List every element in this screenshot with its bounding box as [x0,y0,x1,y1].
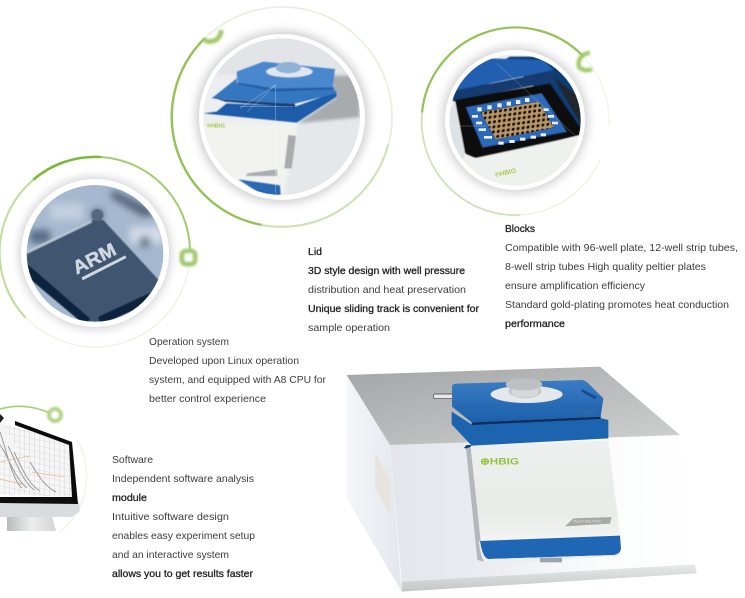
panel: software feature [0,406,87,532]
text block: software [112,455,255,580]
text block: lid: 3D style design with well pressure [308,266,465,277]
logo: blocks photo: ®HBIO [494,167,517,179]
text block: software: module [112,493,147,504]
text block: software: enables easy experiment setup [112,531,255,542]
text block: lid: distribution and heat preservation [308,285,466,296]
text block: operation system: Operation system [149,337,229,348]
logo: ARM: ARM [69,239,119,278]
text block: lid: Unique sliding track is convenient for [308,304,480,315]
text block: lid [308,247,480,334]
labels: plate strips [472,98,558,145]
photo: sliding lid [204,38,360,195]
text block: blocks: Compatible with 96-well plate, 12-well strip tubes, [505,243,738,254]
main instrument photo [347,367,697,592]
text block: blocks: Standard gold-plating promotes heat conduction [505,300,729,311]
text block: software: and an interactive system [112,550,229,561]
logo: lid photo: ®HBIG [207,122,226,129]
panel: lid feature circle [172,7,392,227]
text block: operation system: better control experience [149,394,266,405]
text block: blocks [505,224,738,330]
text block: blocks: performance [505,319,565,330]
sliding lid [452,378,608,450]
text block: operation system: system, and equipped with A8 CPU for [149,375,327,386]
text block: software: Intuitive software design [112,512,229,523]
node: software ring [49,409,61,421]
photo: gold plated block [447,53,587,190]
front door [466,440,621,565]
node: blocks ring [579,53,592,70]
text block: lid: Lid [308,247,322,258]
ring: ARM [0,157,190,347]
ring: blocks [422,28,609,215]
panel: blocks feature circle [422,28,609,215]
node: lid ring [203,30,221,42]
text block: blocks: 8-well strip tubes High quality peltier plates [505,262,706,273]
photo: ARM chip [26,185,164,322]
logo: HBIG: ⊕HBIG [480,456,519,466]
text block: software: Software [112,455,153,466]
text block: software: Independent software analysis [112,474,254,485]
panel: operation system feature circle [0,157,195,347]
text block: lid: sample operation [308,323,390,334]
node: ARM ring [182,251,195,264]
ring: lid [172,7,392,227]
badge text: Real Time PCR [573,519,601,524]
instrument body [347,367,697,592]
text block: blocks: ensure amplification efficiency [505,281,646,292]
text block: blocks: Blocks [505,224,535,235]
text block: operation system: Developed upon Linux operation [149,356,299,367]
text block: operation system [149,337,327,405]
text block: software: allows you to get results faster [112,569,254,580]
icon: monitor with amplification curves [0,414,80,531]
ring: software [0,406,87,532]
